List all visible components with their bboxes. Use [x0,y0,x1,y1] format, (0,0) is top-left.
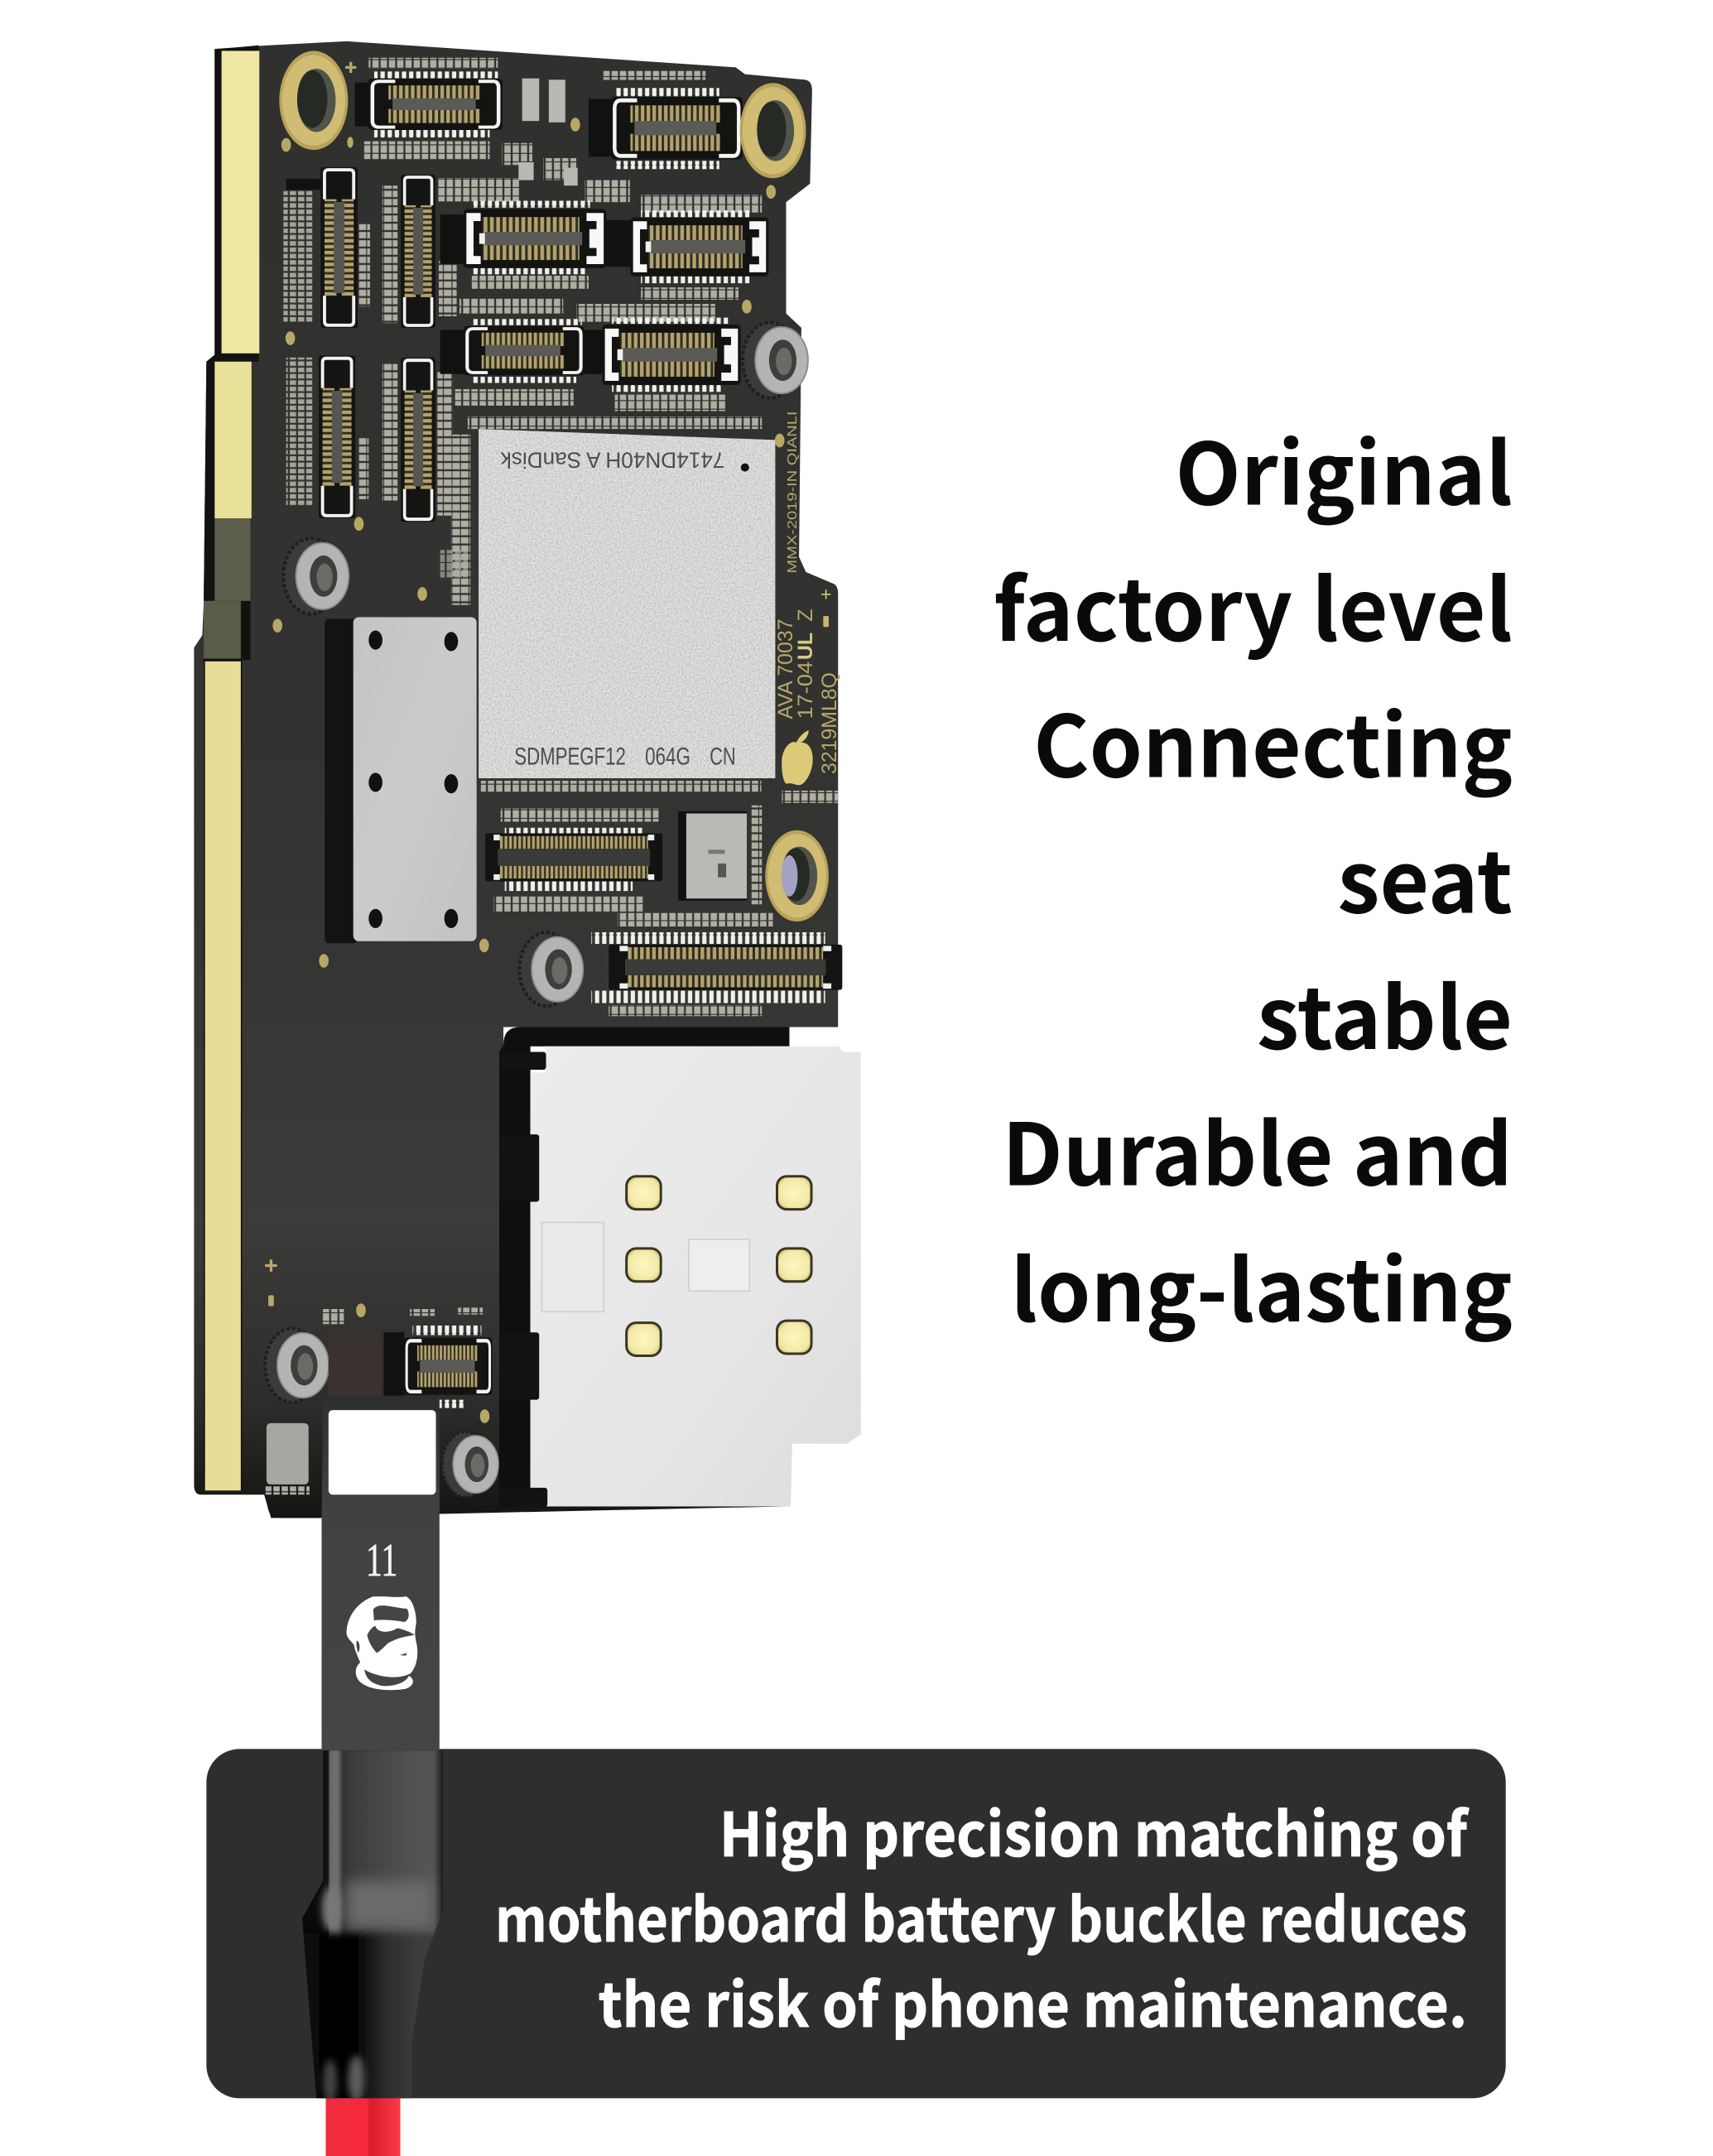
text: feature headline: seat [1337,815,1513,938]
SIM-style contact plate [531,1047,861,1506]
text: feature headline: Original [1175,406,1513,529]
dark board edge [204,46,258,1490]
bottom components [266,1307,493,1494]
silkscreen markings: 3219ML8Q [818,672,841,774]
flap plating [274,1502,318,1513]
caption panel [206,1749,1506,2098]
faint square left [542,1222,604,1311]
dark shading beside connectors [286,83,631,374]
chip label inverted: 7414DN40H A SanDisk [500,447,724,472]
black plate clips [499,1052,547,1507]
faint square right [689,1239,749,1291]
motherboard test fixture [194,41,861,1750]
caption panel: motherboard battery buckle reduces [495,1872,1467,1960]
silkscreen markings [774,411,841,774]
text: feature headline: stable [1257,950,1513,1074]
gold contacts [627,1177,811,1355]
solder pads [283,58,838,1359]
gold mounting holes [279,51,829,922]
dot marker [741,464,749,472]
text: feature headline: Connecting [1033,678,1513,801]
caption panel: the risk of phone maintenance. [599,1957,1467,2045]
infographic canvas [194,41,1512,2156]
chip label: SDMPEGF12 [514,743,626,770]
model number: 11 [366,1535,397,1586]
icon: apple logo [782,730,813,785]
metal shield with screw holes [354,617,477,941]
silkscreen markings: Z [794,609,817,622]
silkscreen markings: 17-04 [794,662,817,719]
text: feature headline: Durable and [1002,1087,1513,1210]
ribbon tail with white window [321,1400,440,1750]
flash memory chip [479,429,775,778]
gray components top [518,79,578,185]
threaded standoffs [265,322,808,1497]
gold edge plating [204,51,259,1490]
text: feature headline: long-lasting [1011,1223,1513,1346]
icon: bearded face logo [346,1596,417,1690]
small gold test points [265,62,784,1423]
silkscreen markings: + [820,584,831,605]
white window [329,1410,435,1494]
chip label [514,743,736,770]
red wires [325,2096,400,2156]
metal shield shadow [325,618,358,943]
text: feature headline [994,406,1513,1346]
silkscreen markings: UL [794,633,817,660]
connectors: lower long [485,833,842,990]
text: feature headline: factory level [994,542,1513,666]
slot behind SIM plate [499,1027,789,1506]
silkscreen markings: AVA 70037 [774,618,797,719]
chip label: 064G [645,743,690,770]
connectors: horizontal top [368,79,769,385]
BGA chip [678,811,747,901]
silkscreen markings: MMX-2019-IN QIANLI [786,411,800,574]
chip label: CN [710,743,736,770]
gold flap under board [264,1492,319,1518]
cable: black sleeve and red wires [302,1750,443,2156]
connectors: vertical left [319,167,435,522]
board body [194,41,838,1518]
caption panel: High precision matching of [719,1787,1470,1874]
sleeve [302,1750,443,2098]
